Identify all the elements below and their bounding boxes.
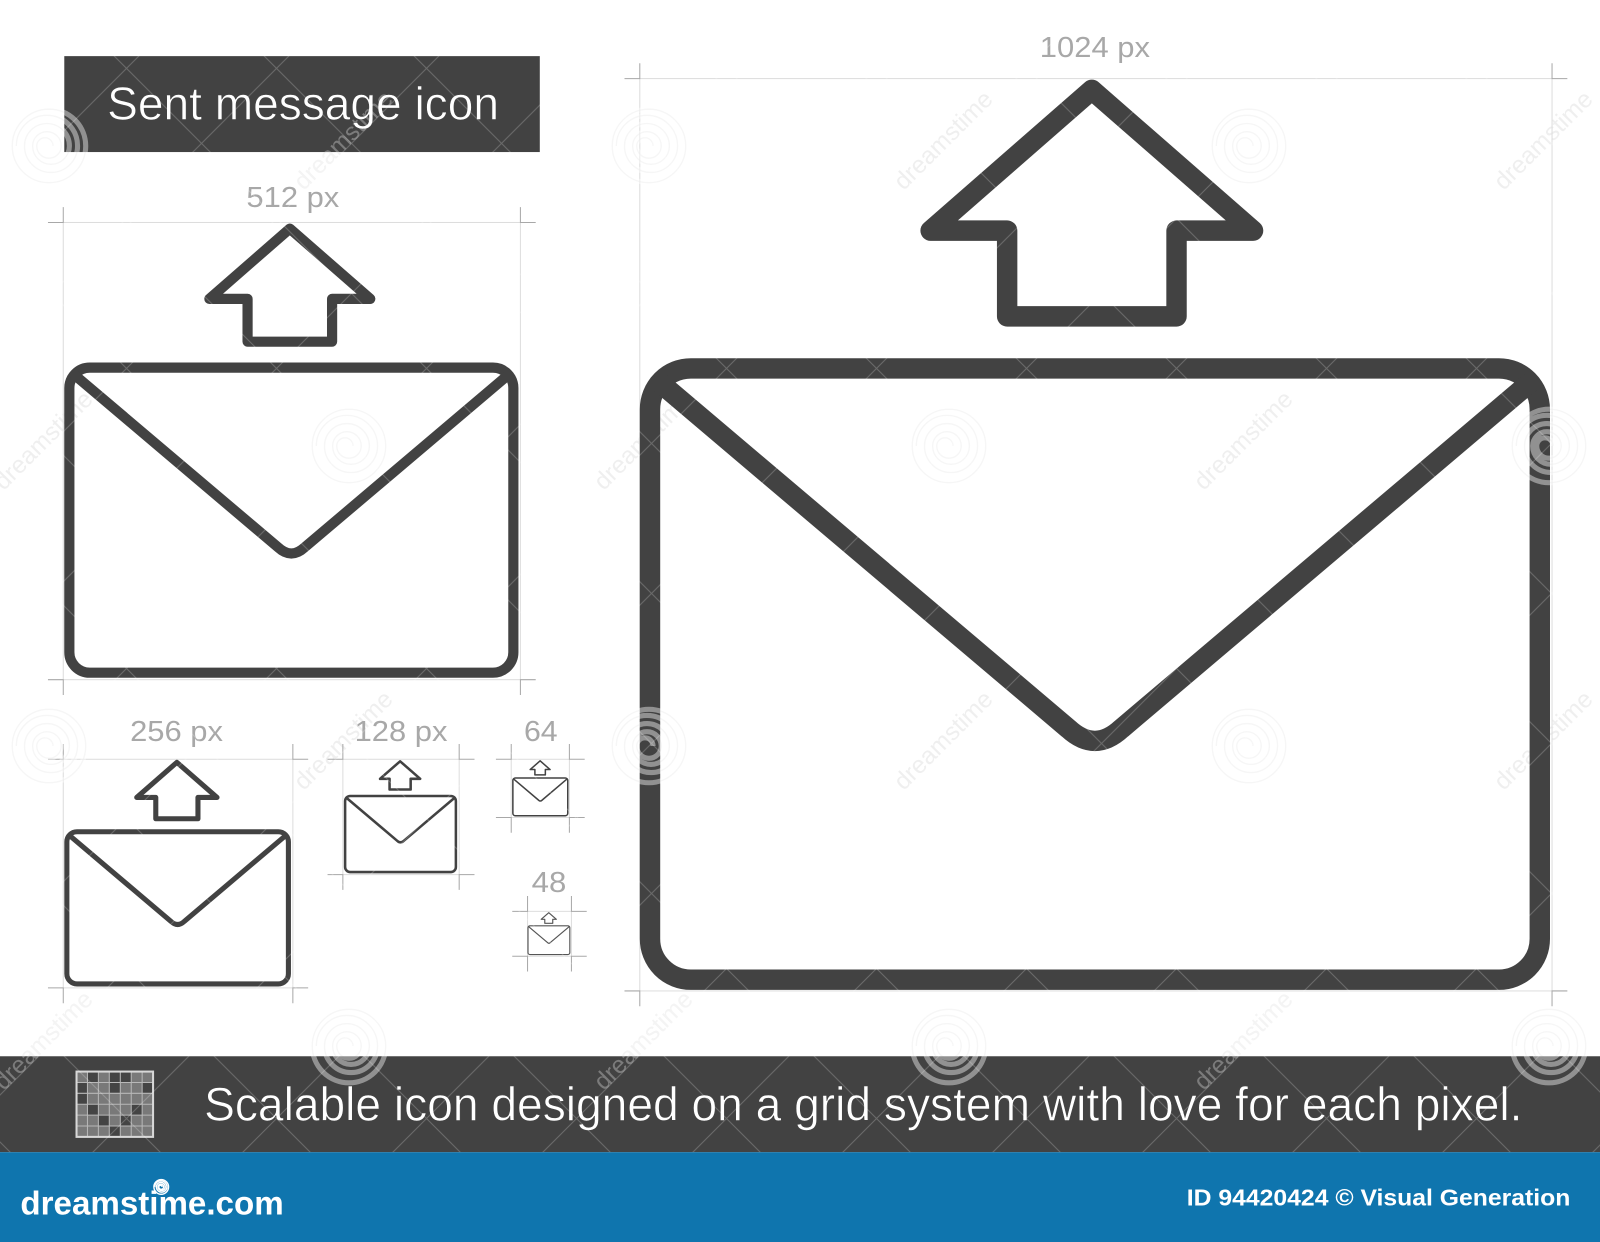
watermark: faint text: dreamstime [589,986,698,1096]
blue footer bar [0,1152,1600,1242]
icon: envelope with arrow 512 px [69,229,513,673]
footer credit: ID 94420424 © Visual Generation [1187,1184,1570,1210]
title bar [64,56,540,152]
label: 512 px: 512 px [246,182,339,214]
tagline text: Scalable icon designed on a grid system with love for each pixel. [204,1079,1522,1131]
title bar: Sent message icon [107,77,499,129]
watermark: overlay spirals visible on dark areas [12,109,1586,1083]
guides: 64 px [496,744,585,833]
guides: 256 px [48,744,308,1003]
icon: envelope with arrow 1024 px [650,90,1540,980]
watermark: faint text: dreamstime [1489,86,1598,195]
icon: envelope with arrow 48 px [528,913,570,955]
guides: 1024 px [624,63,1567,1006]
watermark: faint text: dreamstime [1189,986,1298,1096]
guides: 128 px [328,744,474,890]
watermark: faint spirals [12,109,1586,1083]
watermark: overlay text visible on dark areas [0,86,1298,1096]
grey tagline bar [0,1056,1600,1152]
watermark: overlay text visible on dark areas: dreamstime [289,86,398,195]
watermark: faint text: dreamstime [889,86,998,195]
icon: pixel grid [77,1072,153,1137]
watermark: overlay text visible on dark areas: dreamstime [589,986,698,1096]
watermark: faint text: dreamstime [589,386,698,495]
label: 128 px: 128 px [355,716,447,748]
icon: envelope with arrow 256 px [67,762,288,984]
watermark: overlay text visible on dark areas: dreamstime [1189,986,1298,1096]
icon: envelope with arrow 64 px [513,761,568,816]
watermark: faint text: dreamstime [1489,686,1598,795]
label: 256 px: 256 px [130,716,223,748]
icon: envelope with arrow 128 px [345,761,456,872]
watermark: faint text: dreamstime [889,686,998,795]
label: 48: 48 [532,867,566,899]
watermark: faint text: dreamstime [289,686,398,795]
label: 1024 px: 1024 px [1040,32,1150,64]
guides: 512 px [48,207,536,695]
watermark: faint text: dreamstime [1189,386,1298,495]
logo: dreamstime.com: dreamstime.com [20,1185,284,1222]
guides: 48 px [512,896,587,972]
label: 64: 64 [524,716,558,748]
watermark: faint text: dreamstime [289,86,398,195]
